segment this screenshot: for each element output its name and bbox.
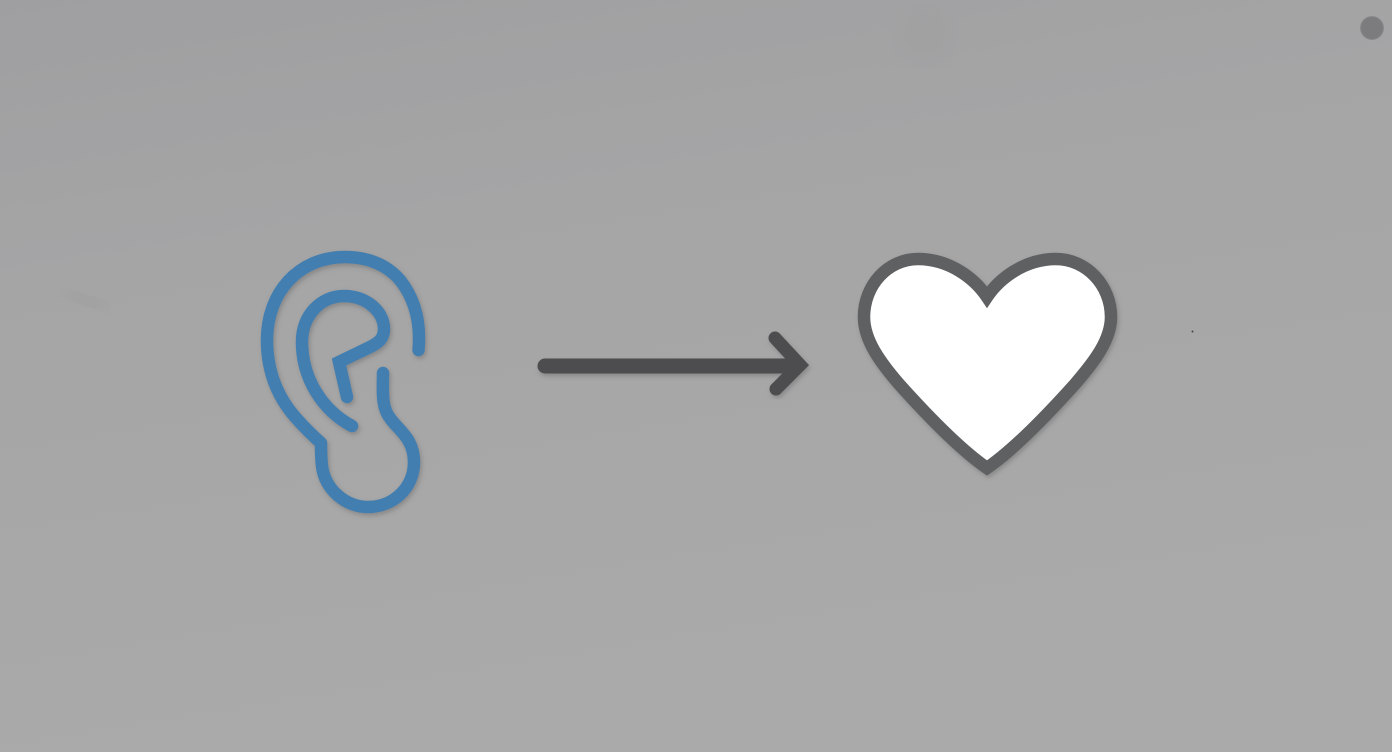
icon: ear outline xyxy=(267,257,419,507)
ear outer helix and lobe xyxy=(267,257,419,507)
ear inner fold xyxy=(302,296,384,426)
indicator dot xyxy=(1360,16,1384,40)
arrow head xyxy=(775,338,800,389)
icon: white heart with grey outline xyxy=(864,259,1111,468)
arrow pointing right xyxy=(545,338,800,389)
arrow shaft xyxy=(545,358,795,374)
